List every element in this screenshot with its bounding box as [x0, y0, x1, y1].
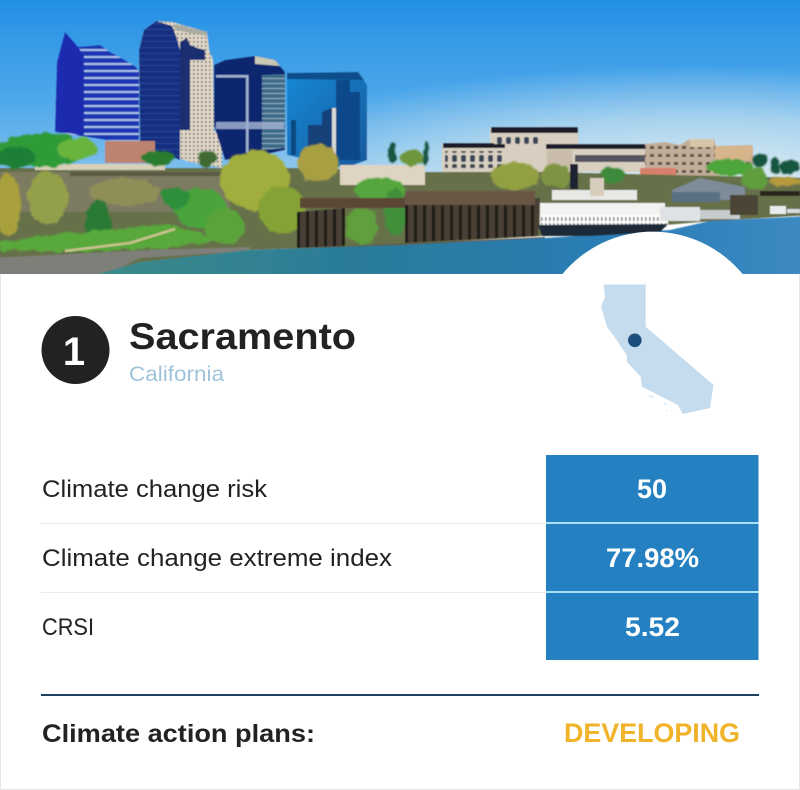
white riverboat [538, 164, 700, 236]
footer label: climate action plans: Climate action plans: [42, 720, 315, 748]
panel: skyline photo [0, 0, 800, 285]
sky [0, 0, 800, 190]
panel: climate metrics table [41, 455, 758, 660]
turquoise glass tower [287, 72, 367, 168]
rocky shoreline [0, 246, 250, 274]
metric: climate change risk: Climate change risk [42, 476, 268, 503]
metric: climate change extreme index: 77.98% [606, 543, 699, 573]
blue striped tower [55, 32, 139, 145]
map backdrop circle [562, 232, 743, 274]
rank badge [42, 316, 110, 384]
tan hotel buildings [640, 138, 754, 177]
riverfront wooden piers [285, 191, 545, 250]
state subheading: California [129, 363, 224, 386]
footer status: developing: DEVELOPING [564, 718, 740, 748]
marina and boathouse [672, 178, 800, 219]
metric: CRSI: 5.52 [625, 612, 680, 642]
rank badge: 1 [63, 330, 85, 374]
tall cream and navy tower [139, 21, 222, 168]
lawn and path [0, 224, 220, 252]
ground mass behind trees [0, 167, 800, 268]
water [97, 216, 800, 274]
metric: climate change risk: 50 [637, 474, 667, 504]
icon: California map with location marker [601, 284, 714, 414]
capitol-side buildings [442, 127, 646, 172]
metric: CRSI [42, 593, 758, 660]
metric: climate change extreme index [42, 524, 758, 591]
city heading: Sacramento [129, 316, 356, 357]
distant evergreen trees [388, 140, 800, 175]
metric: CRSI: CRSI [42, 614, 94, 641]
tree canopy [0, 133, 800, 250]
dark glass tower [214, 56, 285, 160]
metric: climate change extreme index: Climate change extreme index [42, 545, 392, 572]
metric: climate change risk [42, 455, 758, 522]
